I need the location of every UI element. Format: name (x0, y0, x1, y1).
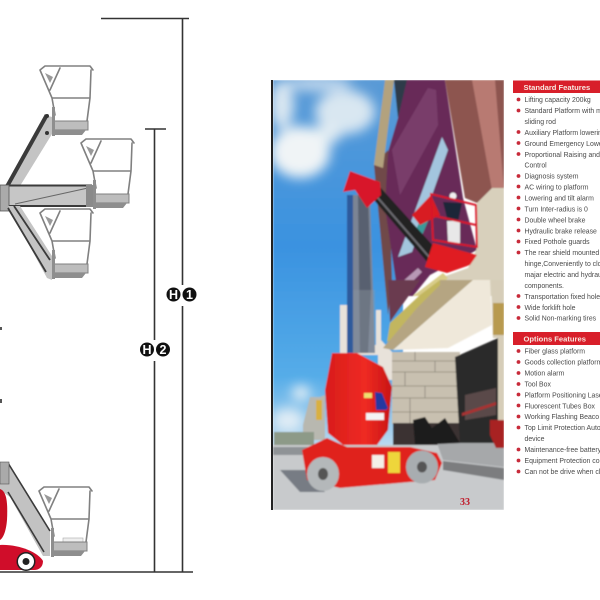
heading: standard features (513, 80, 600, 93)
pillar (490, 295, 504, 422)
platform: lower position (40, 209, 93, 279)
options features list: Can not be drive when cl (524, 469, 600, 476)
curb (443, 461, 504, 480)
basket body (425, 243, 477, 273)
building cream edge (374, 80, 394, 168)
canopy fascia (383, 280, 473, 350)
base placards (372, 455, 384, 468)
machine base (302, 438, 442, 488)
heading: options features (513, 332, 600, 345)
options features list: Working Flashing Beaco (524, 414, 599, 421)
standard features list (517, 97, 600, 322)
background white buildings (340, 305, 392, 380)
panel: standard features (513, 80, 600, 322)
stone joints (392, 352, 460, 424)
middle arm horizontal (0, 185, 93, 211)
sidewalk (437, 443, 504, 467)
standard features list: Proportional Raising and (524, 152, 600, 159)
standard features list: AC wiring to platform (524, 184, 589, 192)
upper clouds (270, 77, 375, 178)
road (273, 445, 504, 510)
standard features list: Lifting capacity 200kg (524, 97, 591, 104)
H1 label (166, 288, 196, 302)
page number: 33 (460, 497, 470, 508)
photo: lift at building (270, 77, 504, 510)
yellow sign lower (413, 273, 448, 296)
glass doors (455, 338, 498, 445)
standard features list: The rear shield mounted (524, 250, 599, 257)
heading: standard features: Standard Features (524, 83, 590, 92)
upper arm raised (5, 114, 52, 187)
options features list: Fiber glass platform (524, 348, 585, 356)
operator (443, 192, 462, 243)
standard features list: Diagnosis system (524, 174, 579, 180)
photo left border (271, 80, 273, 510)
standard features list: Auxiliary Platform lowerin (524, 130, 600, 137)
building dark wall (374, 150, 392, 315)
standard features list: Wide forklift hole (524, 305, 576, 312)
dark base (393, 423, 463, 445)
standard features list: majar electric and hydrau (524, 272, 600, 279)
options features list: Equipment Protection co (524, 458, 600, 465)
panel: options features (513, 332, 600, 476)
basket rails (431, 194, 477, 247)
platform link (412, 195, 440, 225)
platform: middle position (81, 139, 134, 209)
distant town (303, 395, 325, 440)
banner panels (398, 137, 448, 257)
standard features list: Control (524, 162, 547, 170)
H1 label: H (169, 288, 178, 302)
standard features list: Solid Non-marking tires (524, 316, 597, 322)
boom arm (374, 187, 436, 263)
options features list: Top Limit Protection Auto (524, 425, 600, 432)
technical drawing: machine reach diagram (0, 66, 134, 571)
rear wheel (307, 457, 339, 491)
lantern (493, 303, 504, 335)
ground line (0, 571, 193, 573)
standard features list: Fixed Pothole guards (524, 239, 590, 246)
options features list (517, 348, 600, 476)
H2 label: H (142, 343, 152, 357)
options features list: Maintenance-free battery (524, 447, 600, 454)
machine decals (375, 392, 388, 410)
tiny drawing remnants at left edge (0, 327, 2, 403)
stone wall (392, 352, 460, 424)
brick wall (445, 80, 504, 203)
standard features list: Double wheel brake (524, 218, 586, 224)
H2 label: 2 (160, 343, 167, 357)
mast (347, 195, 353, 353)
purple banner (385, 80, 477, 296)
canopy underside (393, 280, 492, 350)
standard features list: Lowering and tilt alarm (524, 196, 594, 202)
arm at ground position (0, 462, 50, 556)
options features list: Goods collection platform (524, 360, 600, 366)
brick corner (472, 80, 504, 190)
stone cornice (446, 187, 504, 296)
H1 label: 1 (186, 288, 193, 302)
far road band (273, 446, 308, 456)
sky (273, 80, 403, 450)
options features list: Fluorescent Tubes Box (524, 404, 596, 410)
machine red body (0, 489, 43, 571)
dimension H1 (101, 18, 196, 572)
platform: top position (40, 66, 93, 136)
lower cloud (272, 386, 310, 432)
standard features list: Turn Inter-radius is 0 (524, 206, 588, 214)
door reflections (465, 388, 496, 420)
lower arm (8, 206, 52, 280)
dimension H2 (140, 129, 170, 572)
options features list: Tool Box (524, 382, 551, 388)
standard features list: components. (524, 283, 564, 290)
heading: options features: Options Features (524, 334, 586, 344)
mast head red (343, 171, 381, 208)
options features list: Motion alarm (524, 370, 565, 378)
standard features list: hinge,Conveniently to clo (524, 261, 600, 268)
options features list: device (524, 436, 545, 443)
sign (387, 280, 440, 342)
platform: ground position (39, 487, 92, 557)
H2 label (140, 342, 170, 357)
dark wall above sign (388, 280, 420, 322)
window (394, 80, 408, 118)
standard features list: Standard Platform with m (524, 108, 600, 115)
standard features list: Transportation fixed hole (524, 294, 600, 301)
motorcycles (413, 417, 460, 445)
red motorcycle (490, 420, 504, 448)
standard features list: sliding rod (524, 119, 556, 126)
standard features list: Hydraulic brake release (524, 228, 597, 236)
front wheel (406, 450, 438, 484)
machine body (325, 353, 392, 445)
machine shadow (280, 470, 325, 492)
